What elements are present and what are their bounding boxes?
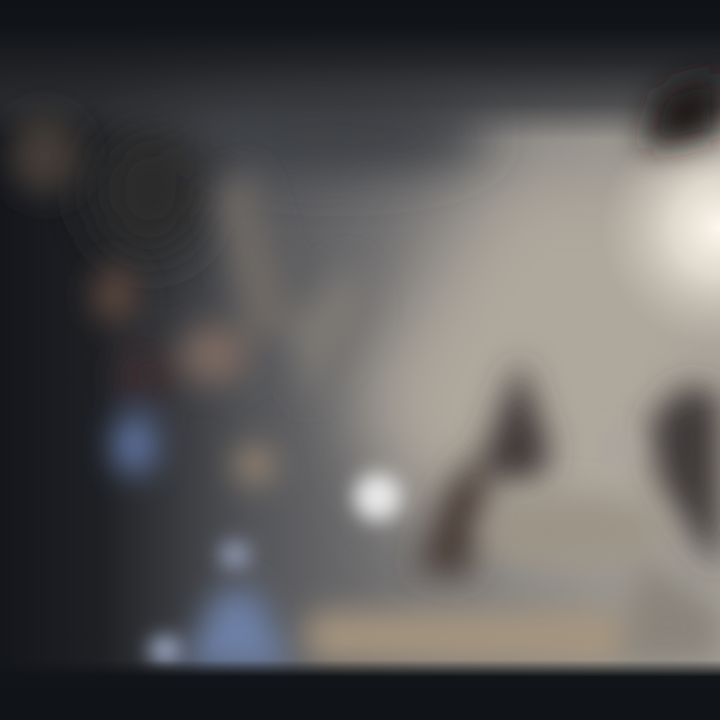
light haze: triangular mass at right <box>350 170 720 560</box>
bottom frame bar <box>0 660 720 720</box>
dark upper haze <box>90 95 490 260</box>
bright bokeh spots <box>149 430 635 664</box>
top frame bar <box>0 0 720 140</box>
warm light glow at right <box>570 100 720 360</box>
foreground warm floor <box>305 495 720 662</box>
warm and blue bokeh, left side <box>10 115 370 670</box>
dark silhouettes <box>415 70 720 580</box>
